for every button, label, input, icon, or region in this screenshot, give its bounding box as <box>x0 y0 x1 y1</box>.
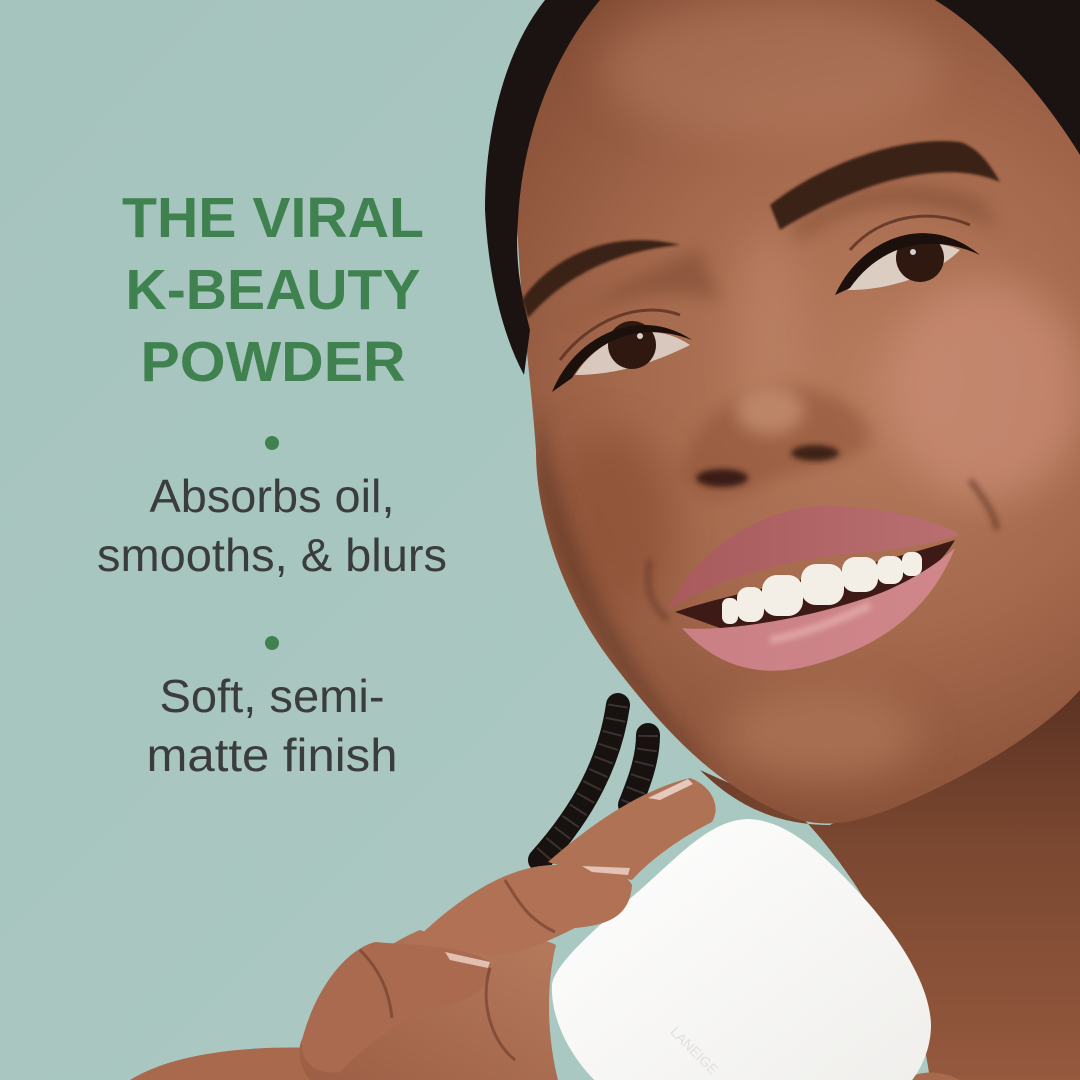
nose <box>680 385 870 498</box>
eyebrow right <box>770 141 1000 230</box>
ring finger <box>302 942 491 1072</box>
teeth <box>722 552 922 624</box>
hair <box>485 0 600 375</box>
benefit: finish: Soft, semi- <box>160 670 384 722</box>
benefit: finish <box>146 670 398 781</box>
bullet dot 2 <box>265 636 279 650</box>
hand and fingers <box>299 778 716 1080</box>
benefit: finish: matte finish <box>146 729 398 781</box>
palm <box>299 930 558 1080</box>
face <box>517 0 1080 824</box>
heading: THE VIRAL <box>122 186 424 250</box>
eye right <box>835 216 980 295</box>
compact case <box>552 819 931 1080</box>
heading: POWDER <box>140 330 406 394</box>
face shading and highlights <box>535 0 1080 780</box>
upper lip <box>668 506 960 610</box>
index finger top <box>548 778 716 880</box>
eye left <box>552 310 692 392</box>
heading: K-BEAUTY <box>126 258 420 322</box>
benefit: absorbs oil: smooths, & blurs <box>97 529 447 581</box>
heading <box>122 186 424 394</box>
embossed logo: LANEIGE <box>667 1023 722 1078</box>
bullet dot 1 <box>265 436 279 450</box>
text panel <box>97 186 447 781</box>
mouth interior <box>675 540 955 628</box>
eyebrow left <box>522 240 680 318</box>
neck and shoulder <box>700 680 1080 1080</box>
lower lip <box>682 548 955 671</box>
benefit: absorbs oil <box>97 470 447 581</box>
middle finger <box>410 865 632 955</box>
mouth <box>668 506 960 671</box>
benefit: absorbs oil: Absorbs oil, <box>150 470 394 522</box>
hair braids behind neck <box>540 705 648 860</box>
finger creases <box>360 880 555 1060</box>
